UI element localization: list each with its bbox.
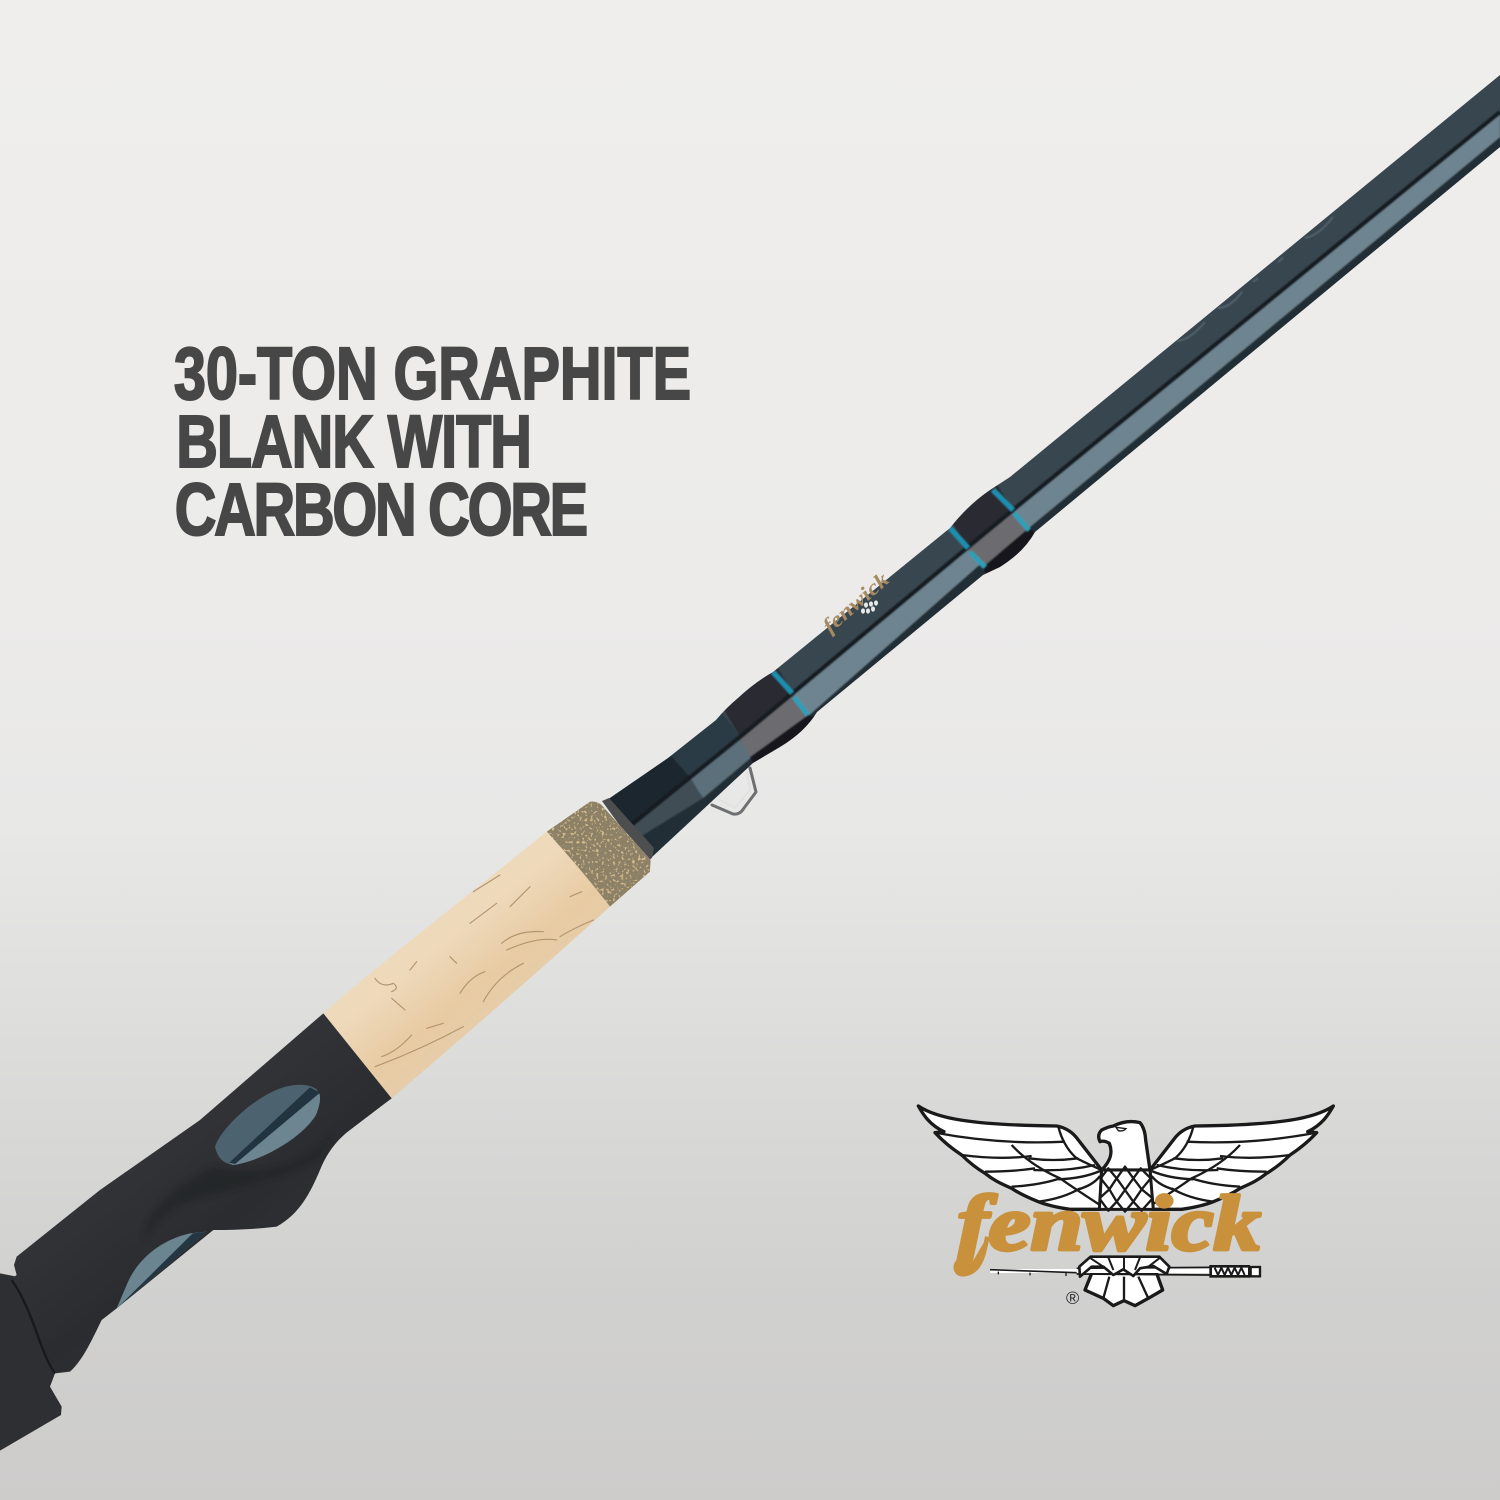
fenwick eagle logo: [918, 1106, 1333, 1308]
central stripe: [625, 112, 1500, 830]
upper window: [215, 1085, 320, 1165]
small fenwick mark on the blank: fenwick: [818, 567, 894, 638]
lower window: [117, 1232, 207, 1308]
section: second wrap: [953, 485, 1009, 544]
rod in talons: [990, 1265, 1260, 1278]
cork grip: [323, 798, 655, 1098]
section: near grip: [610, 756, 689, 822]
speckled composite cork: [546, 802, 650, 906]
heading: 30-ton graphite blank with carbon core: 30-TON GRAPHITE: [174, 333, 691, 416]
rod blank: [590, 60, 1500, 870]
reel seat base: [0, 1273, 62, 1451]
guide wire: [712, 768, 756, 814]
heading: 30-ton graphite blank with carbon core: CARBON CORE: [175, 469, 588, 552]
cork cracks: [375, 875, 593, 1067]
metal winding check: [602, 798, 654, 862]
eagle tail: [1085, 1273, 1163, 1306]
lower dark edge: [635, 137, 1500, 870]
handle shading: [143, 1133, 333, 1240]
heading: 30-ton graphite blank with carbon core: [174, 333, 691, 552]
foam handle: [10, 1013, 392, 1373]
handle: [0, 1013, 392, 1451]
eagle head: [1099, 1122, 1150, 1170]
heading: 30-ton graphite blank with carbon core: BLANK WITH: [176, 401, 532, 484]
registered mark: ®: [1066, 1288, 1079, 1308]
section: first wrap: [724, 668, 789, 735]
fenwick wordmark: fenwick: [957, 1179, 1261, 1266]
lower light band: [794, 114, 1500, 716]
eagle talons: [1079, 1257, 1169, 1277]
right wing: [1150, 1106, 1333, 1209]
faint blank lettering: [1177, 217, 1333, 341]
seam between handle and reel seat: [12, 1280, 55, 1373]
section: transition: [672, 714, 738, 775]
cyan thread wraps: [773, 490, 1029, 715]
left wing: [918, 1106, 1102, 1209]
eagle breast scales: [1099, 1167, 1153, 1212]
